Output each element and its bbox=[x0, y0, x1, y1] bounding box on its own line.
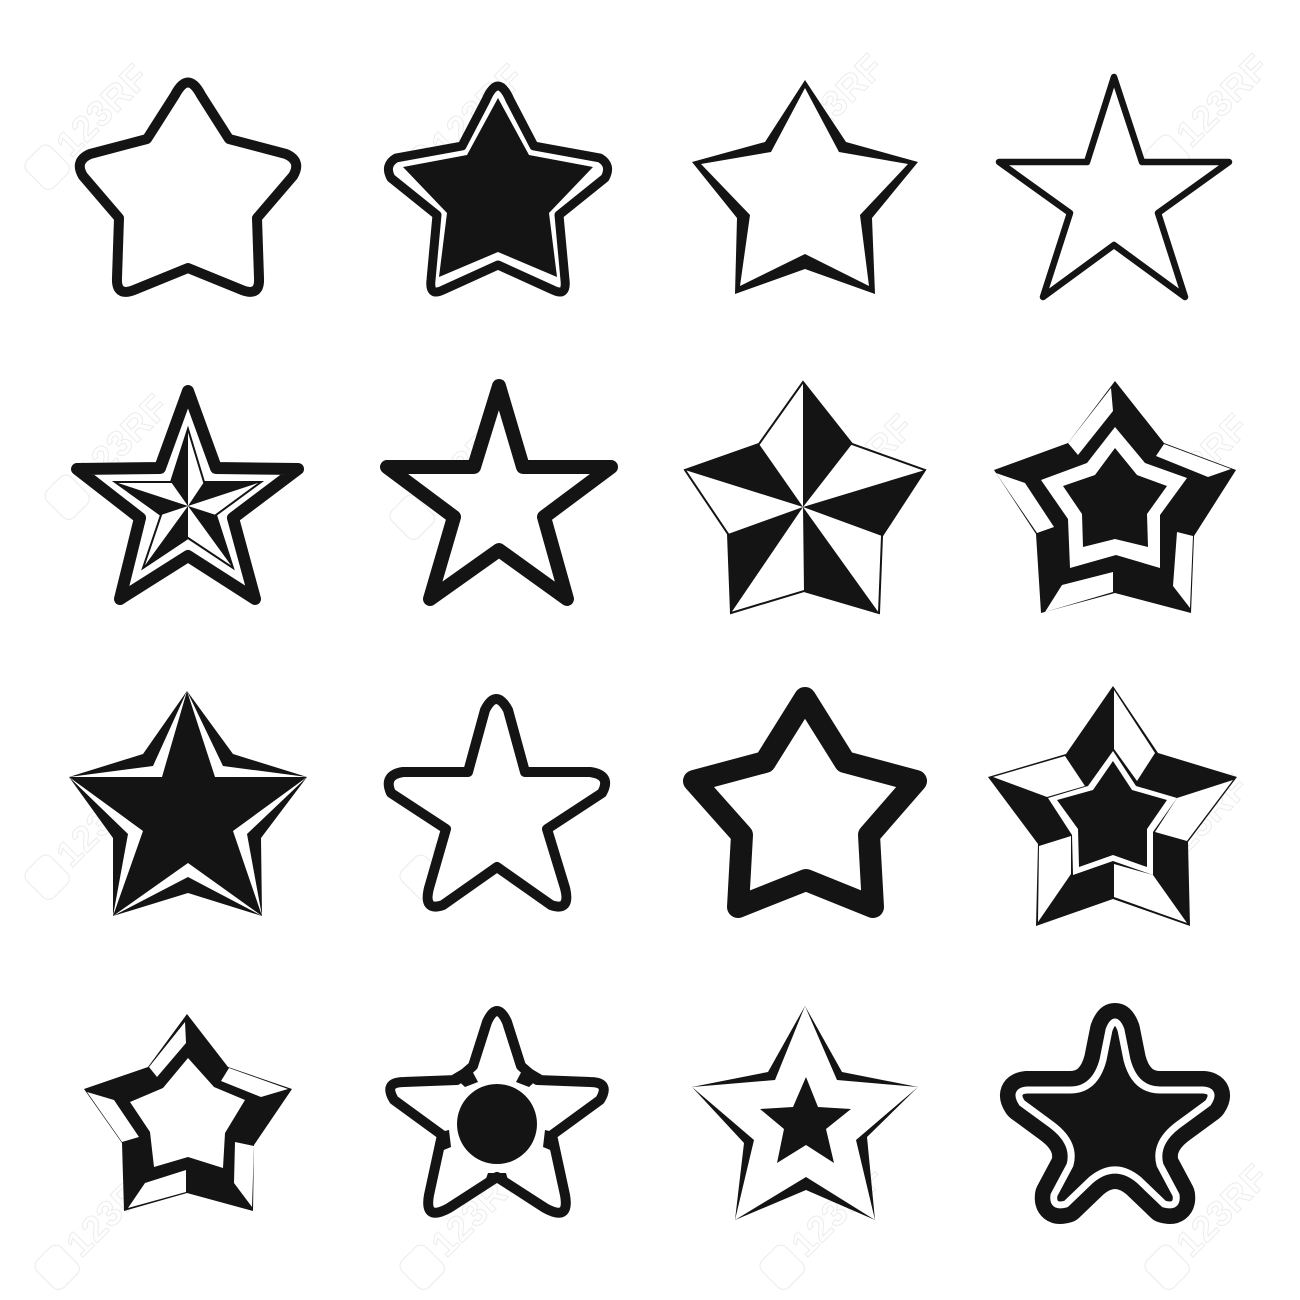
watermark pattern: 123RF bbox=[58, 1156, 167, 1264]
watermark pattern: 123RF bbox=[423, 1156, 532, 1264]
watermark pattern: 123RF bbox=[48, 56, 157, 164]
icon: beveled star with inner star bbox=[994, 381, 1236, 613]
icon: nested faceted star bbox=[77, 391, 298, 599]
icon: rounded slim outline star bbox=[389, 699, 605, 907]
icon: pinwheel faceted star bbox=[685, 382, 925, 613]
watermark pattern: 123RF bbox=[68, 386, 177, 494]
icon: rounded outline star bbox=[80, 82, 296, 292]
watermark pattern: 123RF bbox=[1168, 1156, 1277, 1264]
watermark pattern: 123RF bbox=[413, 406, 522, 514]
icon: faceted star with inner solid star bbox=[988, 686, 1237, 926]
watermark pattern: 123RF bbox=[813, 406, 922, 514]
icon: outline star with solid circle bbox=[390, 1011, 604, 1213]
icon: fat rounded solid star with white line bbox=[1019, 1022, 1211, 1205]
icon: sliver star with small solid star bbox=[692, 1006, 918, 1220]
watermark pattern: 123RF bbox=[48, 766, 157, 874]
watermark pattern: 123RF bbox=[1148, 406, 1257, 514]
watermark pattern: 123RF bbox=[423, 56, 532, 164]
icon: thin sharp outline star bbox=[999, 77, 1229, 297]
watermark pattern: 123RF bbox=[423, 766, 532, 874]
icon: thick angular outline star bbox=[387, 386, 611, 599]
icon: sharp outline star with thick inner corners bbox=[692, 80, 918, 294]
icon: solid star with white slivers bbox=[69, 691, 307, 916]
watermark pattern: 123RF bbox=[783, 1156, 892, 1264]
solid circle bbox=[457, 1084, 537, 1164]
watermark pattern: 123RF bbox=[783, 46, 892, 154]
icon: beveled hollow star bbox=[84, 1014, 292, 1211]
watermark pattern: 123RF bbox=[1148, 766, 1257, 874]
watermark pattern: 123RF bbox=[783, 766, 892, 874]
watermark pattern: 123RF bbox=[1168, 46, 1277, 154]
icon: heavy outline star bbox=[694, 698, 916, 907]
icon: solid star with outline bbox=[388, 86, 608, 292]
